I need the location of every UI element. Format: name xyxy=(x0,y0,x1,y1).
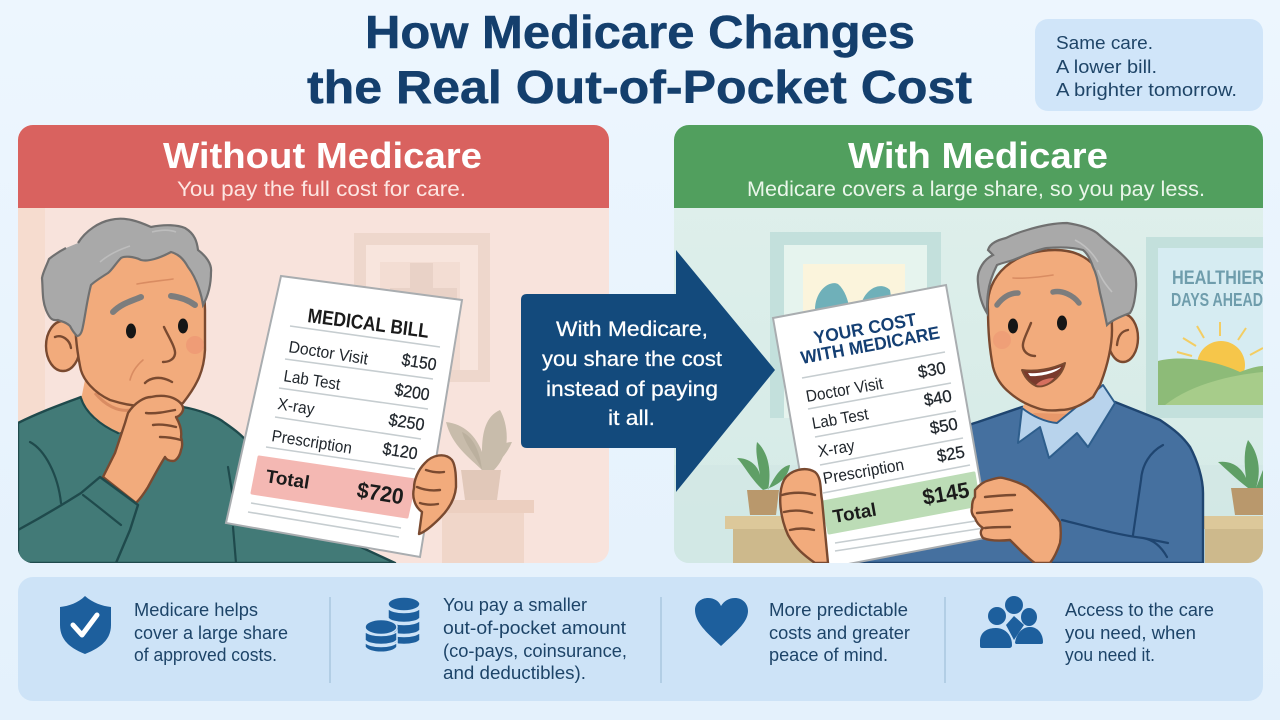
title: How Medicare Changes xyxy=(365,6,915,58)
header: without Medicare xyxy=(18,125,609,208)
text: predictable costs xyxy=(769,599,910,665)
header: without Medicare: Without Medicare xyxy=(163,135,482,176)
icon: coins xyxy=(365,597,420,652)
text: access to care xyxy=(1065,599,1214,665)
arrow: with Medicare you share the cost: With Medicare, xyxy=(556,318,708,341)
text: cover share: cover a large share xyxy=(134,622,288,643)
medical bill: Prescription xyxy=(270,427,353,458)
man: worried xyxy=(18,219,395,563)
title: the Real Out-of-Pocket Cost xyxy=(307,61,972,113)
arrow: with Medicare you share the cost: you share the cost xyxy=(542,348,722,371)
callout: same care: A brighter tomorrow. xyxy=(1056,79,1237,100)
bill: your cost with Medicare: Doctor Visit xyxy=(805,375,885,406)
medical bill: Doctor Visit xyxy=(287,338,370,369)
bill: your cost with Medicare: Total xyxy=(831,499,878,527)
header: with Medicare xyxy=(674,125,1263,208)
hands holding bill xyxy=(780,469,1061,563)
bill: your cost with Medicare: $30 xyxy=(916,358,947,382)
panel: with Medicare xyxy=(674,125,1264,570)
bill: your cost with Medicare: $40 xyxy=(922,386,953,410)
bill: your cost with Medicare: YOUR COST xyxy=(812,309,918,348)
arrow: with Medicare you share the cost: instead of paying xyxy=(546,378,718,401)
header: without Medicare: You pay the full cost for care. xyxy=(177,178,466,201)
medical bill: MEDICAL BILL xyxy=(306,305,430,343)
bill: your cost with Medicare: $145 xyxy=(921,477,971,510)
benefits strip xyxy=(18,577,1263,701)
bill: your cost with Medicare: WITH MEDICARE xyxy=(799,323,941,368)
text: predictable costs: More predictable xyxy=(769,599,908,620)
medical bill: $120 xyxy=(381,439,419,463)
bill: your cost with Medicare xyxy=(773,285,990,570)
title xyxy=(307,6,972,113)
medical bill: $250 xyxy=(387,410,426,435)
text: smaller amount: You pay a smaller xyxy=(443,594,587,615)
arrow: with Medicare you share the cost: it all. xyxy=(608,407,655,430)
icon: shield xyxy=(60,596,111,654)
arrow: with Medicare you share the cost xyxy=(521,250,775,492)
bill: your cost with Medicare: X-ray xyxy=(817,437,857,461)
header: with Medicare: Medicare covers a large share, so you pay less. xyxy=(747,178,1205,201)
header: with Medicare: With Medicare xyxy=(848,135,1108,176)
callout: same care: Same care. xyxy=(1056,32,1153,53)
bill: your cost with Medicare: $50 xyxy=(928,414,959,438)
medical bill: $200 xyxy=(393,380,431,404)
icon: heart xyxy=(695,598,748,646)
text: predictable costs: costs and greater xyxy=(769,622,910,643)
text: smaller amount: and deductibles). xyxy=(443,662,586,683)
panel: without Medicare xyxy=(18,125,609,563)
medical bill: $720 xyxy=(355,477,406,509)
room background: picture frame and furniture xyxy=(18,208,534,563)
medical bill xyxy=(226,276,462,557)
text: smaller amount xyxy=(443,594,627,683)
text: smaller amount: (co-pays, coinsurance, xyxy=(443,640,627,661)
text: cover share: of approved costs. xyxy=(134,644,277,665)
text: smaller amount: out-of-pocket amount xyxy=(443,617,626,638)
room background: pictures, plants and furniture: HEALTHIER xyxy=(1172,268,1264,289)
callout: same care xyxy=(1035,19,1263,111)
text: access to care: you need it. xyxy=(1065,644,1155,665)
text: cover share: Medicare helps xyxy=(134,599,258,620)
text: access to care: Access to the care xyxy=(1065,599,1214,620)
callout: same care: A lower bill. xyxy=(1056,56,1157,77)
hand holding bill xyxy=(413,455,456,534)
medical bill: Lab Test xyxy=(282,367,342,394)
text: predictable costs: peace of mind. xyxy=(769,644,888,665)
text: cover share xyxy=(134,599,288,665)
bill: your cost with Medicare: $25 xyxy=(935,442,966,466)
bill: your cost with Medicare: Lab Test xyxy=(811,405,870,433)
icon: people xyxy=(980,596,1043,648)
bill: your cost with Medicare: Prescription xyxy=(822,456,905,488)
man: smiling xyxy=(820,223,1203,563)
room background: pictures, plants and furniture xyxy=(674,232,1264,563)
medical bill: X-ray xyxy=(276,395,316,419)
medical bill: $150 xyxy=(400,350,438,374)
text: access to care: you need, when xyxy=(1065,622,1196,643)
medical bill: Total xyxy=(264,465,311,493)
